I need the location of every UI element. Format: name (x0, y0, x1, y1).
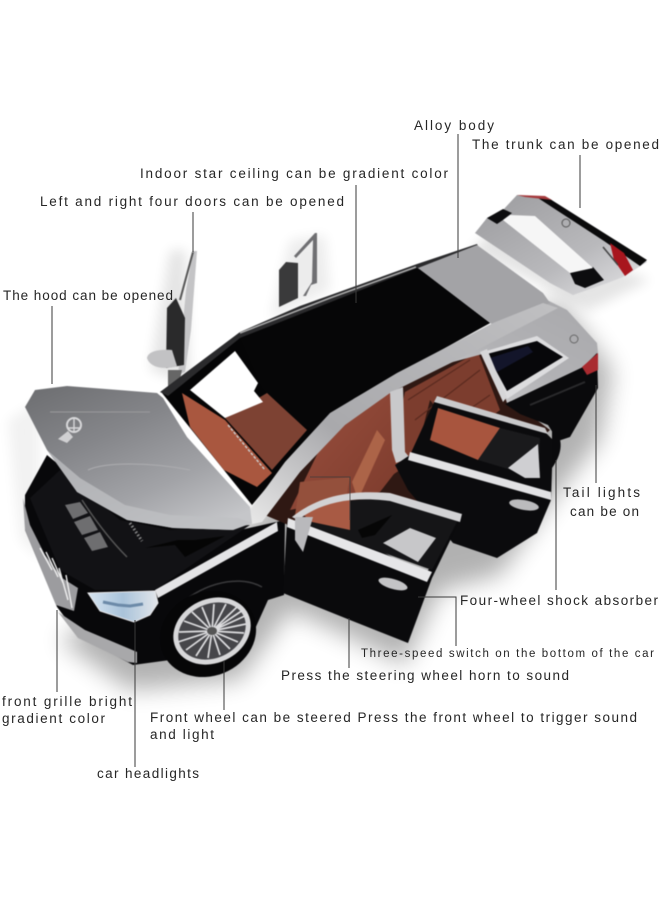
mirror bracket (295, 517, 313, 552)
badge (570, 335, 578, 343)
grille (23, 498, 78, 611)
label: trunk: The trunk can be opened (472, 137, 659, 152)
front door open (283, 492, 462, 643)
black roof panel (240, 268, 490, 432)
engine cover details (65, 500, 225, 557)
label: tail lights: Tail lights (563, 485, 640, 500)
open left door behind the car (147, 251, 197, 388)
label: front wheel line two: and light (150, 727, 214, 742)
hood (25, 386, 252, 530)
silver rear deck (418, 245, 550, 325)
windshield opening showing background (190, 351, 263, 418)
door window view (430, 408, 500, 460)
roof side rail (250, 303, 558, 524)
trunk window showing background (503, 215, 593, 273)
label: four doors: Left and right four doors can be opened (40, 194, 344, 209)
trunk lettering strip (603, 247, 618, 265)
label: three-speed switch: Three-speed switch on the bottom of the car (361, 648, 654, 660)
silver rear body panel (250, 245, 598, 524)
window top bar (434, 396, 548, 434)
front wheel (147, 577, 269, 691)
label: horn: Press the steering wheel horn to sound (281, 668, 569, 683)
trunk frame upper-left corner (487, 209, 512, 224)
label: hood: The hood can be opened (3, 288, 173, 303)
label: shock absorber: Four-wheel shock absorber (460, 593, 658, 608)
rear door open (395, 396, 561, 558)
label: headlights: car headlights (97, 766, 199, 781)
door window opening (297, 499, 458, 570)
rear quarter window (483, 336, 569, 399)
open rear left door behind the car (279, 233, 317, 307)
window bottom bar (408, 452, 551, 500)
black rear body (505, 353, 598, 441)
side cabin interior (253, 350, 550, 530)
label: star ceiling: Indoor star ceiling can be gradient color (140, 166, 449, 181)
trunk badge (562, 219, 570, 227)
lower chrome lip (58, 612, 137, 663)
roof rail (160, 244, 480, 396)
window top arc (292, 492, 462, 522)
door handle (377, 575, 409, 593)
leader lines (52, 134, 596, 767)
trunk spoiler black edge (538, 198, 647, 266)
roof and cabin base (160, 244, 490, 505)
label: front grille: front grille bright (2, 694, 132, 709)
headlight (88, 591, 158, 622)
label: front wheel: Front wheel can be steered Press the front wheel to trigger sound (150, 710, 637, 725)
car shadows (8, 225, 650, 690)
tail light (582, 353, 598, 375)
model car (23, 195, 647, 691)
label: tail lights line two: can be on (570, 504, 639, 519)
B pillar (390, 387, 410, 463)
label: front grille line two: gradient color (2, 711, 106, 726)
rear wheel through door window (508, 444, 540, 478)
window bottom bar (287, 518, 432, 582)
red tail-light strip (610, 243, 633, 276)
hood ornament (58, 418, 81, 443)
C pillar (480, 349, 507, 402)
trunk red top accent (517, 195, 552, 200)
black engine bay and front body (23, 455, 285, 665)
trunk frame lower-right corner (570, 267, 604, 288)
open trunk lid (475, 195, 647, 295)
tan dashboard through windshield (182, 393, 272, 487)
fender silver strip (155, 522, 278, 598)
door handle (508, 497, 540, 513)
wing mirror (147, 350, 177, 368)
label: alloy body: Alloy body (414, 118, 494, 133)
